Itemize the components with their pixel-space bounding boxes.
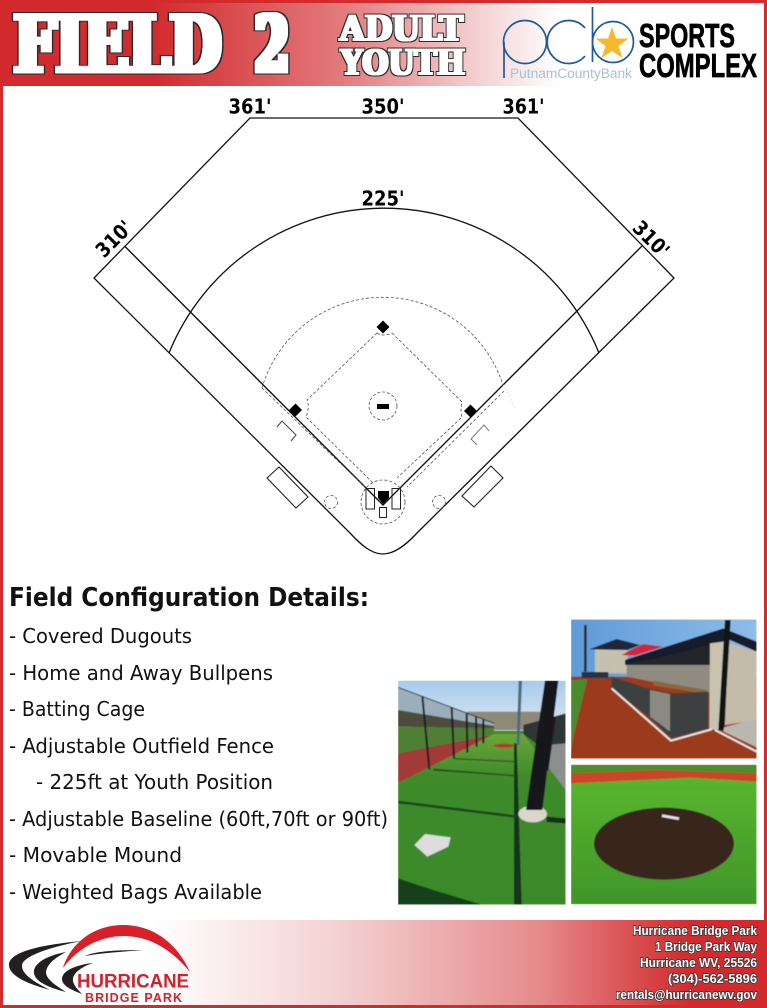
logo: Putnam County Bank <box>504 7 634 81</box>
title: Field 2: 2 <box>255 0 289 91</box>
distance labels: 310' <box>91 216 137 262</box>
contact details: rentals@hurricanewv.gov <box>616 988 757 1002</box>
dugouts <box>267 466 503 508</box>
contact details <box>616 924 757 1002</box>
distance labels: 361' <box>502 94 544 118</box>
distance labels <box>91 94 674 262</box>
logo: Hurricane Bridge Park: HURRICANE <box>77 972 189 992</box>
feature list: - Movable Mound <box>9 843 182 867</box>
heading: Sports Complex <box>639 17 757 84</box>
footer band <box>0 920 767 1008</box>
photo: covered dugout <box>571 619 757 759</box>
feature list: - Adjustable Outfield Fence <box>9 734 274 758</box>
header band <box>0 0 767 91</box>
contact details: 1 Bridge Park Way <box>655 940 757 954</box>
distance labels: 225' <box>362 186 404 210</box>
feature list: - Batting Cage <box>9 697 145 721</box>
panel: field configuration details <box>9 583 388 904</box>
contact details: Hurricane Bridge Park <box>633 924 757 938</box>
feature list: - Adjustable Baseline (60ft,70ft or 90ft) <box>9 807 388 831</box>
distance labels: 361' <box>228 94 272 118</box>
dirt and infield dashed lines <box>262 297 504 524</box>
distance labels: 350' <box>362 94 404 118</box>
feature list: - 225ft at Youth Position <box>36 770 273 794</box>
logo: Putnam County Bank: PutnamCountyBank <box>510 66 632 81</box>
bases and pitching rubber <box>289 320 477 504</box>
contact details: Hurricane WV, 25526 <box>640 956 757 970</box>
heading: Field Configuration Details: <box>9 583 369 613</box>
field diagram <box>91 94 674 554</box>
logo: Hurricane Bridge Park <box>9 925 190 1005</box>
outfield fence and foul lines <box>94 118 674 554</box>
feature list: - Home and Away Bullpens <box>9 661 273 685</box>
subtitle: Adult Youth: ADULT <box>339 8 463 50</box>
distance labels: 310' <box>628 216 674 262</box>
feature list <box>9 624 388 904</box>
photo: bullpen lane <box>398 681 566 905</box>
batter boxes and catcher box <box>366 488 400 518</box>
photo: movable mound <box>571 765 757 904</box>
contact details: (304)-562-5896 <box>668 972 757 986</box>
title: Field 2: FIELD <box>14 0 221 91</box>
subtitle: Adult Youth: YOUTH <box>340 42 465 84</box>
feature list: - Covered Dugouts <box>9 624 192 648</box>
feature list: - Weighted Bags Available <box>9 880 262 904</box>
logo: Hurricane Bridge Park: BRIDGE PARK <box>85 991 182 1005</box>
subtitle: Adult Youth <box>339 8 465 84</box>
bullpen markers <box>277 421 489 445</box>
